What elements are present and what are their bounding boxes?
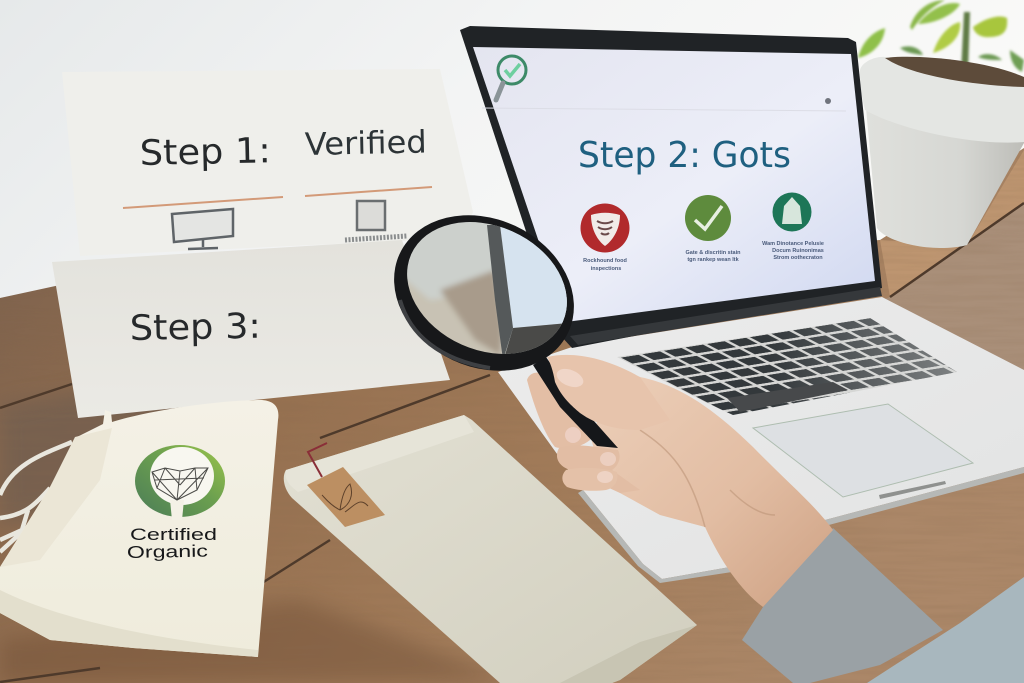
caption: check second line: tgn rankep wean ltk [687,257,740,263]
thumb nail [554,365,586,391]
drawstring bag with Certified Organic logo [0,400,278,657]
index finger behind handle [527,373,592,448]
plant pot [858,0,1024,248]
caption: check: Gate & discritin stain [685,250,741,256]
trackpad [753,404,973,497]
divider lines [123,187,432,208]
pot body [866,108,1024,248]
magnifying glass [394,215,618,448]
wall background [0,0,1024,300]
lens frame [368,187,600,399]
label: Certified Organic: Certified [130,525,217,544]
thumb [547,355,670,430]
ring nail [597,471,613,483]
icon: green check badge [685,195,731,241]
middle nail [600,452,616,466]
caption: garment: Wam Dinotance Pelusie [762,241,824,247]
fingernail: index [565,427,581,443]
front card: Step 3 [52,240,450,418]
caption: shield: Rockhound food [583,258,627,264]
palm and wrist [590,377,833,607]
plant leaves [858,0,1024,72]
cork tag [307,443,385,527]
icon: green garment badge [772,192,812,232]
laptop lid bezel [460,26,882,348]
laptop base [498,297,1024,579]
heading: Step 2: Gots: Step 2: Gots [578,135,791,176]
handle [533,357,618,448]
caption: shield second line: inspections [591,266,621,272]
certified organic logo [135,445,225,520]
ring finger [562,468,618,491]
heading: Step 3: Step 3: [129,307,261,349]
caption: garment third line: Strom oothecraton [773,255,823,261]
heading: Step 1: Step 1: [139,131,271,174]
wooden table [0,148,1024,683]
icon: device square [345,201,407,240]
heading: Verified: Verified [304,124,427,163]
laptop [460,26,1024,583]
icon: red shield badge [580,204,630,252]
thumb and gripping fingers over handle [547,355,670,493]
folded linen pouch with cork tag [284,415,697,683]
soil [885,57,1024,87]
hand holding magnifier [527,373,833,607]
pot rim [860,57,1024,143]
icon: monitor [172,209,233,249]
person's grey sleeve and body [742,528,1024,683]
lens rim highlight [400,300,490,368]
laptop screen [473,47,875,322]
icon: magnifier logo [496,56,526,100]
keyboard [617,318,957,415]
label: Certified Organic [127,525,217,562]
caption: garment second line: Docum Ruinonimas [772,248,824,254]
label: Certified Organic: Organic [127,542,209,562]
middle finger [557,445,640,493]
back card: Step 1 and Verified [62,69,473,256]
front notch [879,481,946,499]
logo mesh [152,468,208,500]
drawstring [0,442,72,552]
lens glass [407,222,567,354]
